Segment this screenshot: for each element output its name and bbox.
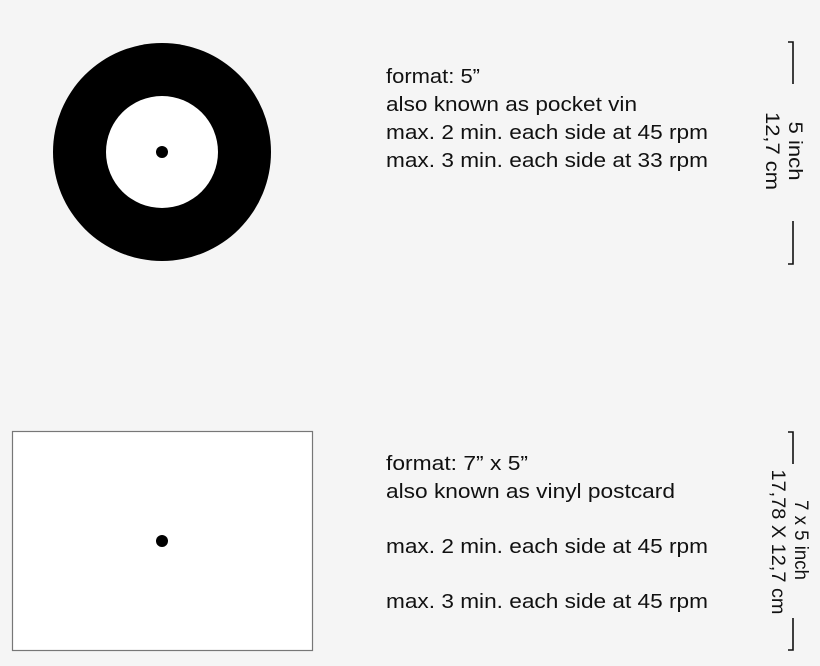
text block: 7x5 format: [386, 453, 708, 613]
dimension bracket: 7x5 inch: 17,78 X 12,7 cm: [767, 470, 788, 614]
text block: 7x5 format: also known as vinyl postcard: [386, 481, 675, 503]
icon: vinyl postcard: [12, 432, 312, 650]
text block: 5 inch format: [386, 66, 708, 172]
dimension bracket: 5 inch: 12,7 cm: [761, 112, 782, 190]
dimension bracket: 5 inch: [761, 42, 805, 264]
text block: 5 inch format: max. 3 min. each side at 33 rpm: [386, 150, 708, 172]
icon: 5 inch vinyl disc: [53, 43, 271, 261]
text block: 5 inch format: format: 5”: [386, 66, 480, 88]
text block: 7x5 format: max. 2 min. each side at 45 rpm: [386, 536, 708, 558]
text block: 7x5 format: max. 3 min. each side at 45 rpm: [386, 591, 708, 613]
text block: 5 inch format: max. 2 min. each side at 45 rpm: [386, 122, 708, 144]
dimension bracket: 5 inch: 5 inch: [784, 122, 805, 180]
text block: 5 inch format: also known as pocket vin: [386, 94, 637, 116]
text block: 7x5 format: format: 7” x 5”: [386, 453, 528, 475]
dimension bracket: 7x5 inch: [767, 432, 811, 650]
dimension bracket: 7x5 inch: 7 x 5 inch: [790, 500, 811, 580]
